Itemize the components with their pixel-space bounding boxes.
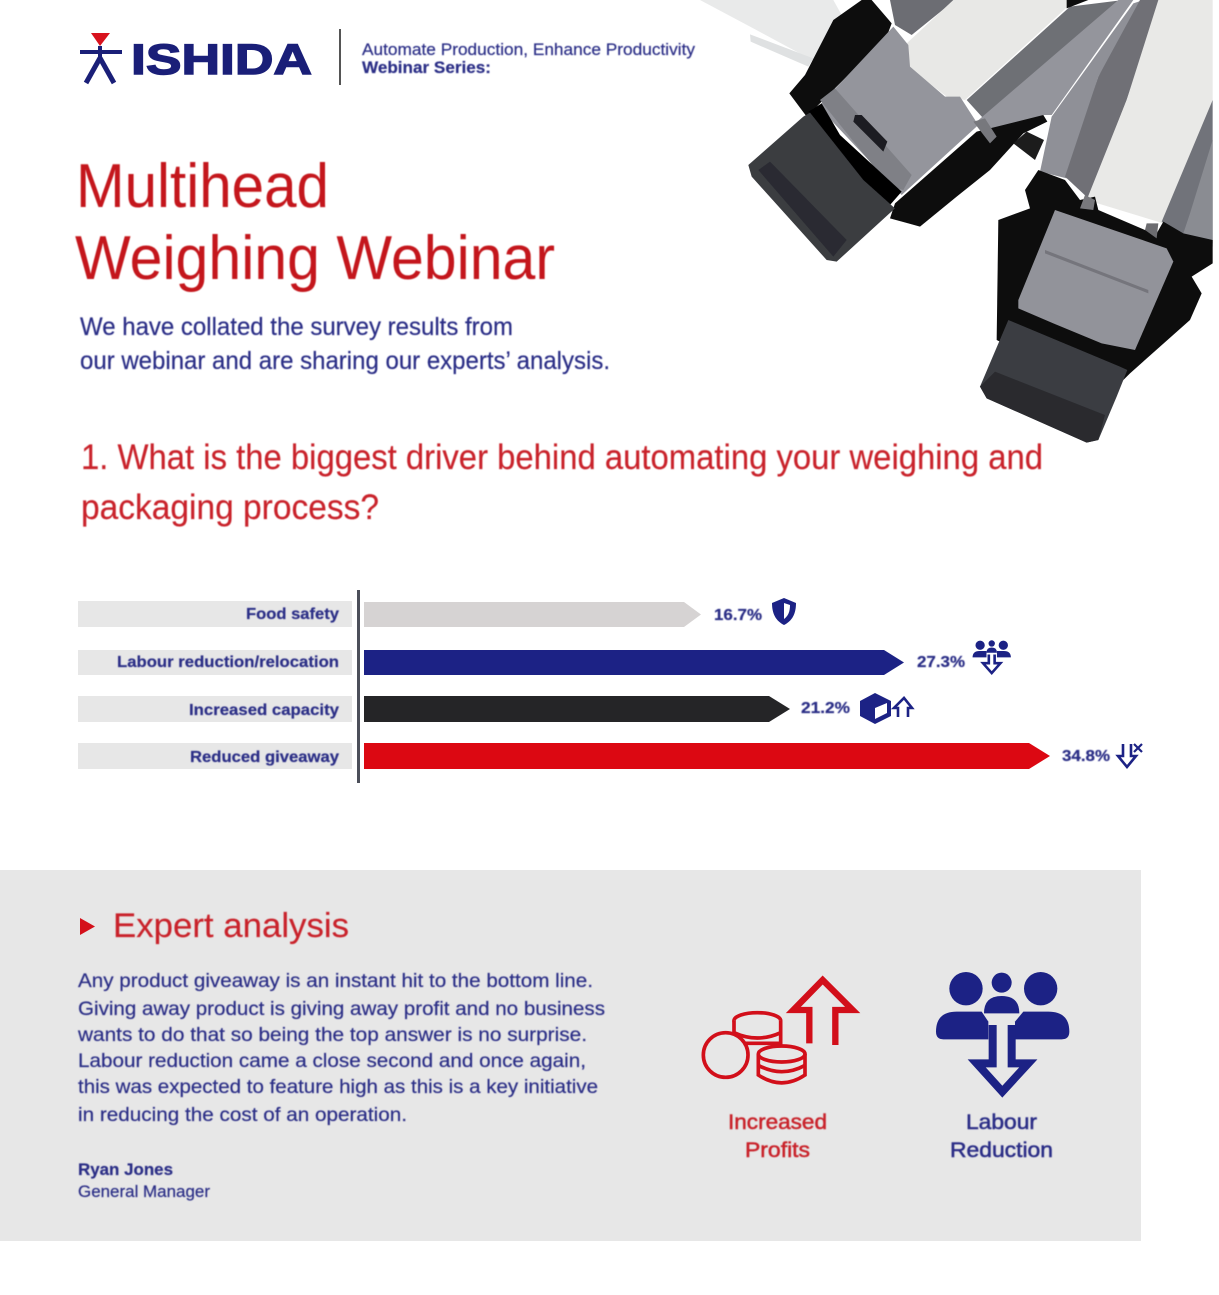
right hopper: body (1018, 210, 1173, 350)
row: food safety: Food safety (246, 606, 339, 623)
intro text (80, 313, 610, 375)
question heading (81, 438, 1043, 527)
row: labour reduction (78, 640, 1011, 675)
logo: Ishida: ISHIDA (131, 36, 312, 84)
right hopper: black frame (997, 170, 1213, 400)
header strapline (362, 40, 696, 77)
row: increased capacity: Increased capacity (189, 702, 339, 719)
analysis text: Giving away product is giving away profit and no business (78, 999, 605, 1020)
row: reduced giveaway (78, 743, 1142, 769)
label: increased profits (728, 1111, 827, 1162)
row: labour reduction: 27.3% (917, 654, 965, 671)
left hopper: black lower bracket (890, 115, 1047, 227)
right hopper: front (980, 320, 1127, 443)
analysis text: wants to do that so being the top answer is no surprise. (77, 1025, 587, 1046)
left hopper: front (748, 113, 895, 262)
analysis text: in reducing the cost of an operation. (78, 1105, 407, 1126)
panel: expert analysis (0, 870, 1141, 1241)
label: increased profits: Increased (728, 1111, 827, 1134)
chart axis (357, 590, 360, 783)
bar chart (78, 590, 1142, 783)
icon: labour reduction (936, 972, 1069, 1092)
question heading: 1. What is the biggest driver behind automating your weighing and (81, 438, 1043, 477)
row: increased capacity: 21.2% (801, 700, 850, 717)
header divider (339, 29, 341, 85)
chute wedges (890, 0, 955, 35)
machine illustration: weigh hoppers (700, 0, 1213, 443)
label: labour reduction: Reduction (950, 1139, 1053, 1162)
row: food safety (78, 598, 796, 627)
row: labour reduction: Labour reduction/relocation (117, 654, 339, 671)
left hopper: body (818, 27, 978, 195)
author: Ryan Jones (78, 1161, 173, 1179)
logo: Ishida (80, 33, 312, 84)
title: Multihead (76, 152, 329, 221)
label: increased profits: Profits (745, 1139, 810, 1162)
question heading: packaging process? (81, 488, 379, 527)
row: reduced giveaway: Reduced giveaway (190, 749, 339, 766)
label: labour reduction (950, 1111, 1053, 1162)
row: reduced giveaway: 34.8% (1062, 748, 1110, 765)
icon: heading marker (80, 918, 95, 935)
header strapline: Automate Production, Enhance Productivity (362, 40, 696, 59)
analysis text: Labour reduction came a close second and once again, (78, 1051, 586, 1072)
row: food safety: 16.7% (714, 607, 762, 624)
icon: increased profits (703, 980, 853, 1083)
label: labour reduction: Labour (966, 1111, 1037, 1134)
intro text: our webinar and are sharing our experts’ analysis. (80, 347, 610, 375)
left hopper: bracket (789, 0, 892, 117)
author (78, 1161, 211, 1201)
intro text: We have collated the survey results from (80, 313, 513, 341)
row: increased capacity (78, 693, 912, 724)
title (75, 152, 555, 293)
title: Weighing Webinar (75, 224, 555, 293)
header strapline: Webinar Series: (362, 58, 491, 77)
analysis text: Any product giveaway is an instant hit to the bottom line. (78, 971, 593, 992)
analysis text (77, 971, 605, 1126)
author: General Manager (78, 1183, 211, 1201)
light sheet, upper left (700, 0, 842, 62)
heading: expert analysis: Expert analysis (113, 907, 349, 945)
analysis text: this was expected to feature high as this is a key initiative (78, 1077, 598, 1098)
